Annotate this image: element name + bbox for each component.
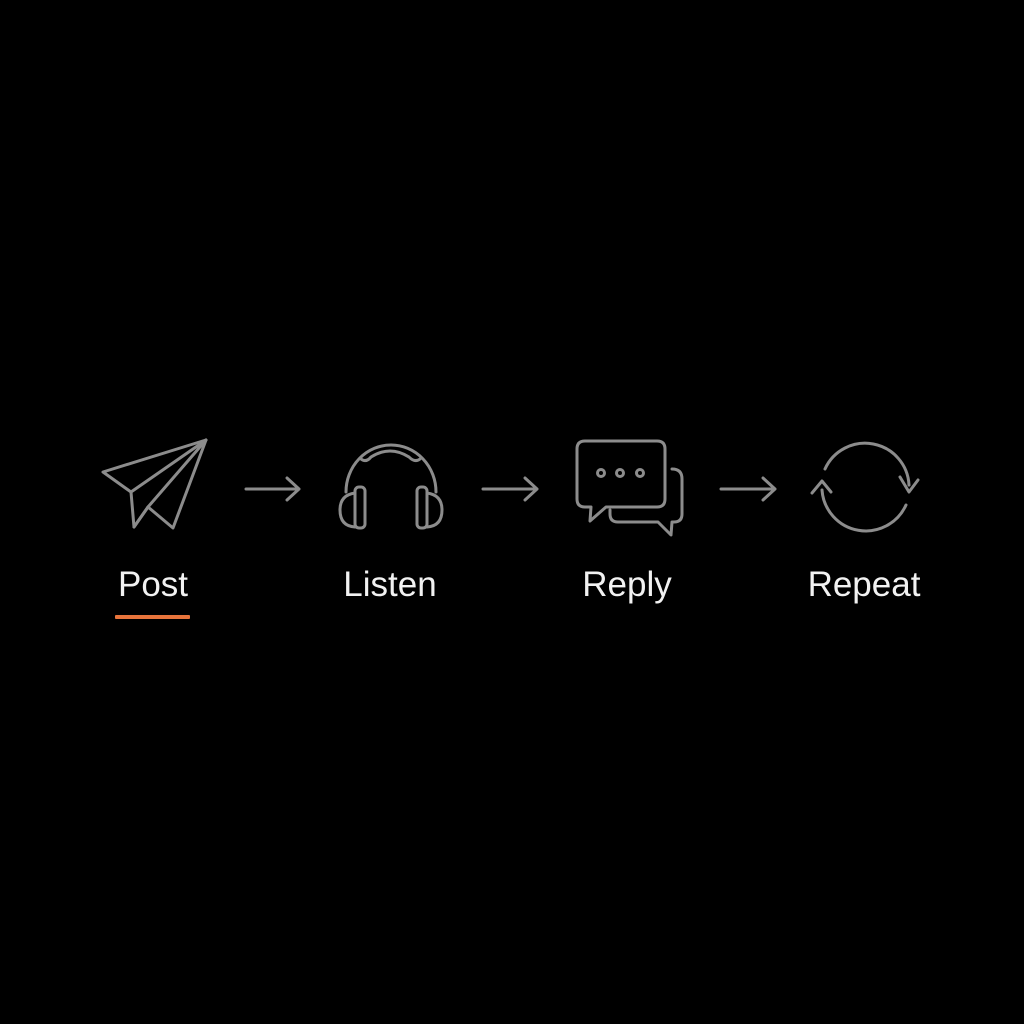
label: Listen: Listen bbox=[343, 565, 437, 604]
underline: active step bbox=[115, 615, 190, 619]
label: Reply: Reply bbox=[582, 565, 672, 604]
icon: headphones bbox=[340, 445, 442, 528]
arrow: listen to reply bbox=[483, 478, 537, 500]
icon: repeat cycle bbox=[812, 443, 918, 531]
arrow: reply to repeat bbox=[721, 478, 775, 500]
icon: chat bubbles bbox=[577, 441, 682, 535]
icon: paper plane bbox=[103, 440, 206, 528]
arrow: post to listen bbox=[246, 478, 299, 500]
label: Post: Post bbox=[118, 565, 188, 604]
label: Repeat: Repeat bbox=[808, 565, 921, 604]
